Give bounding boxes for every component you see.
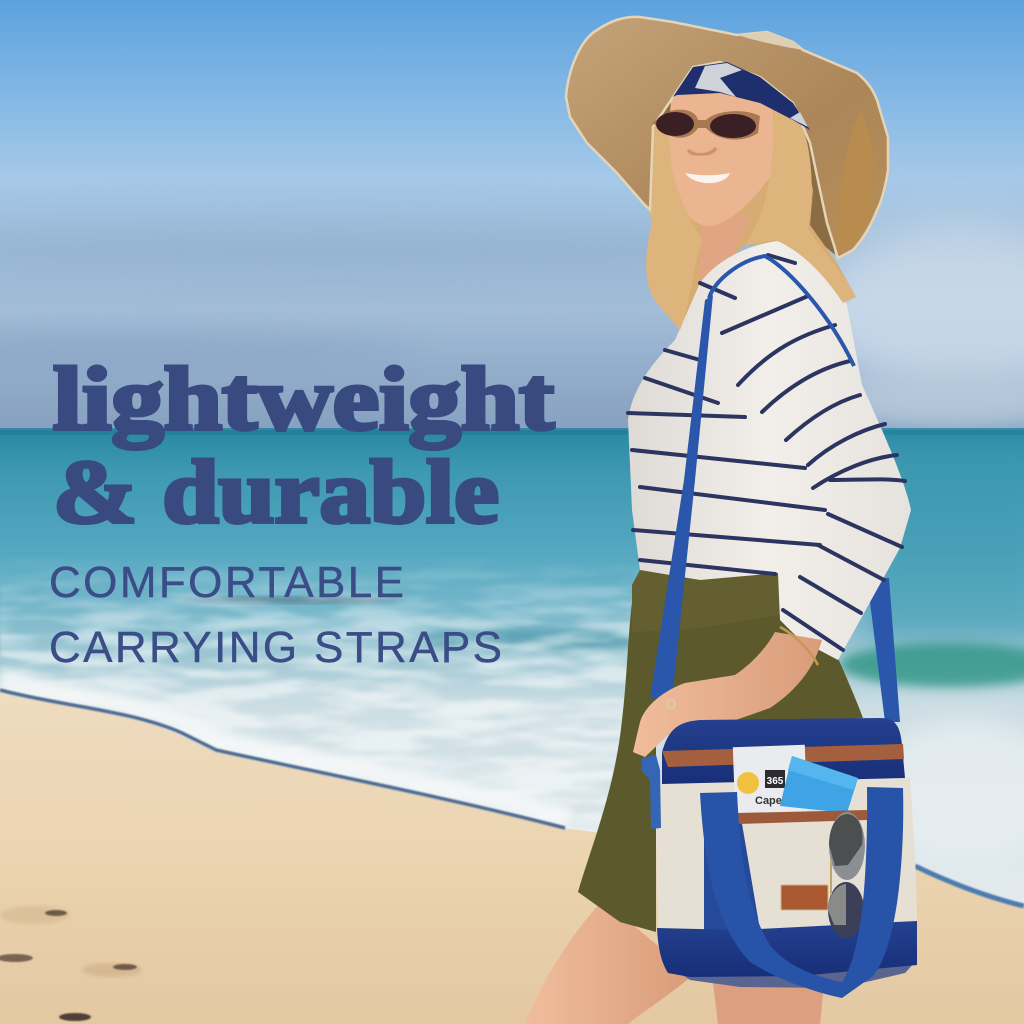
neck — [700, 215, 750, 285]
woman in hat and striped shirt — [525, 17, 911, 1024]
snack packet — [733, 745, 807, 814]
blue almond packet — [780, 756, 858, 813]
shirt stripes — [628, 255, 905, 650]
ocean and surf — [0, 428, 1024, 920]
hanging sunglasses — [828, 812, 865, 938]
sunglasses — [652, 110, 760, 140]
sky background — [0, 0, 1024, 432]
heading line 1: lightweight — [53, 350, 554, 449]
head scarf — [673, 62, 810, 130]
subheading line 2: CARRYING STRAPS — [49, 623, 502, 672]
bag bottom edge — [668, 960, 917, 988]
heading line 2: & durable — [53, 443, 499, 542]
striped shirt — [628, 241, 911, 660]
hair back — [644, 120, 856, 330]
navy base — [657, 921, 917, 977]
carrying handle — [700, 787, 903, 998]
subheading line 1: COMFORTABLE — [49, 558, 404, 607]
brown pocket zipper — [738, 810, 867, 824]
heading: lightweight & durable — [53, 350, 554, 542]
shorts waistband — [632, 570, 795, 632]
cooler bag — [641, 718, 917, 998]
arm and hand — [633, 627, 822, 757]
side zipper pull — [641, 755, 661, 829]
snack packet: Cape C — [755, 795, 793, 807]
brown top zipper — [662, 744, 904, 767]
ring — [667, 700, 675, 708]
nose shadow — [688, 148, 716, 155]
leather patch — [781, 885, 828, 910]
sand beach — [0, 690, 1024, 1024]
subheading: comfortable carrying straps — [49, 558, 502, 672]
back shoulder strap — [867, 578, 900, 722]
front hair — [644, 110, 856, 330]
canvas front shade — [704, 800, 760, 930]
legs — [525, 900, 825, 1024]
olive shorts — [578, 572, 863, 932]
face — [667, 84, 775, 226]
snack packet: 365 — [767, 776, 784, 787]
navy lid — [662, 718, 905, 784]
straw hat — [566, 17, 888, 258]
hat underside behind head — [650, 60, 835, 255]
canvas body — [655, 778, 917, 930]
smile — [685, 173, 730, 183]
bracelet — [780, 627, 818, 665]
shoulder strap — [650, 256, 854, 700]
